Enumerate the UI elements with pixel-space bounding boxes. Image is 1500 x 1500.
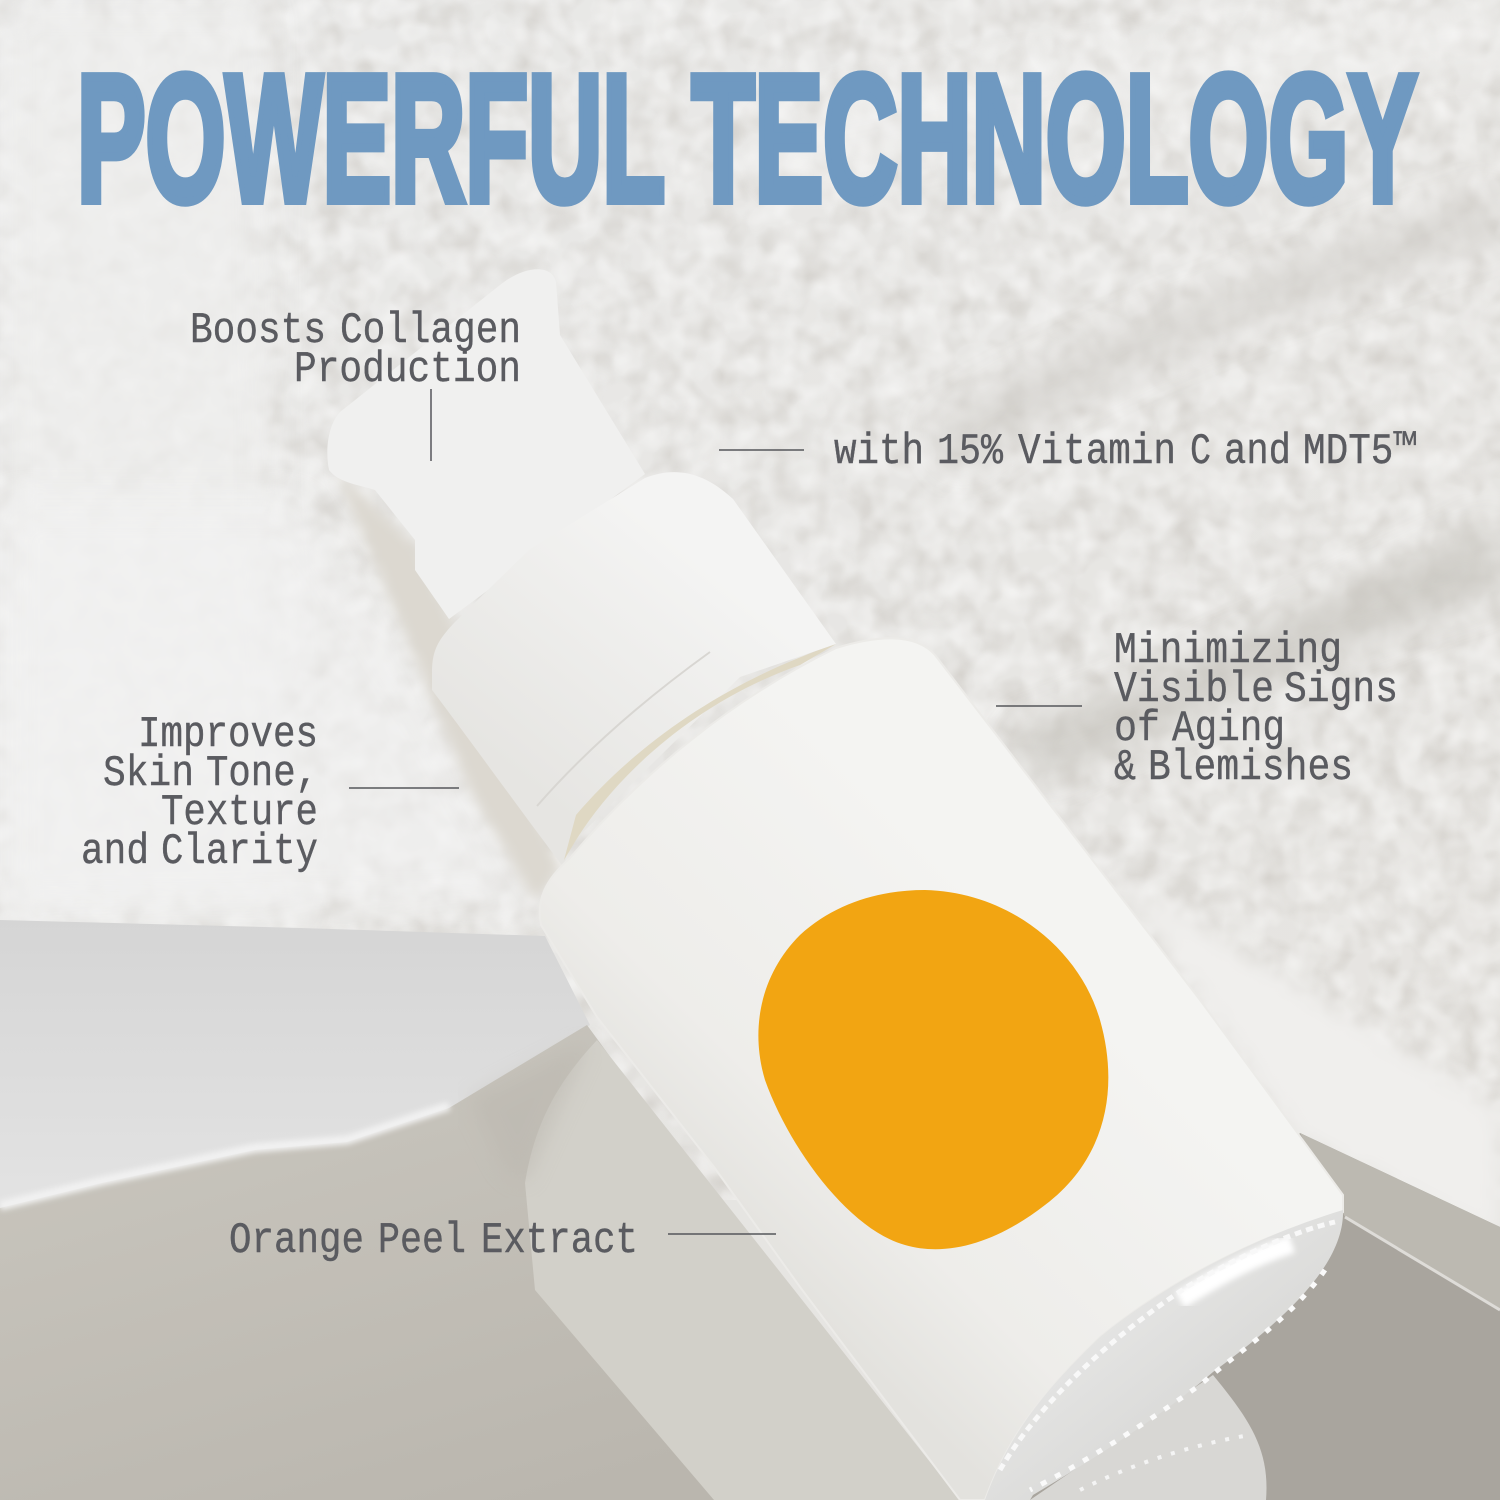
callout: skin tone: Skin (103, 749, 194, 799)
callout: orange peel (229, 1216, 776, 1266)
callout: boosts collagen: Boosts (190, 306, 326, 356)
callout: minimizing signs: Minimizing (1114, 626, 1342, 676)
shadow under pump (335, 470, 560, 900)
glass base (985, 1210, 1343, 1500)
callout: vitamin c: and (1224, 427, 1291, 477)
towel white band at right (1120, 880, 1500, 1240)
callout: skin tone: Clarity (161, 827, 318, 877)
callout: vitamin c: MDT5™ (1303, 427, 1417, 477)
bottle body (540, 638, 1343, 1500)
bottle reflection (525, 1040, 960, 1500)
callout: orange peel: Extract (481, 1216, 638, 1266)
callout: skin tone: Improves (138, 710, 318, 760)
callout: minimizing signs: Blemishes (1148, 743, 1353, 793)
terry towel texture (0, 0, 1500, 1200)
callout: skin tone: Texture (161, 788, 318, 838)
callout: orange peel: Orange (229, 1216, 364, 1266)
callout: skin tone (81, 710, 459, 877)
callout: vitamin c: Vitamin (1018, 427, 1176, 477)
callout: vitamin c: with (834, 427, 924, 477)
orange dot (758, 890, 1108, 1249)
callout: minimizing signs (996, 626, 1398, 793)
lower left shaded towel (0, 920, 590, 1208)
callout: orange peel: Peel (378, 1216, 466, 1266)
callout: minimizing signs: & (1114, 743, 1136, 793)
callout: vitamin c: C (1190, 427, 1211, 477)
callout: boosts collagen: Production (294, 345, 521, 395)
callout: vitamin c: 15% (937, 427, 1003, 477)
callout: minimizing signs: Signs (1284, 665, 1398, 715)
callout: minimizing signs: Aging (1172, 704, 1285, 754)
callout: minimizing signs: of (1114, 704, 1160, 754)
reflection of base (1030, 1375, 1267, 1500)
callout: vitamin c (719, 427, 1417, 477)
surface at right (1000, 1133, 1500, 1500)
product bottle (327, 269, 1343, 1500)
callout: skin tone: and (81, 827, 149, 877)
callout: minimizing signs: Visible (1114, 665, 1274, 715)
fold shadows (930, 190, 1500, 470)
callout: boosts collagen: Collagen (340, 306, 521, 356)
surface below towel (0, 1025, 960, 1500)
callout: skin tone: Tone, (206, 749, 318, 799)
gap above body (564, 644, 836, 860)
collar (432, 472, 836, 868)
pump head (327, 269, 645, 619)
callout: boosts collagen (190, 306, 521, 461)
